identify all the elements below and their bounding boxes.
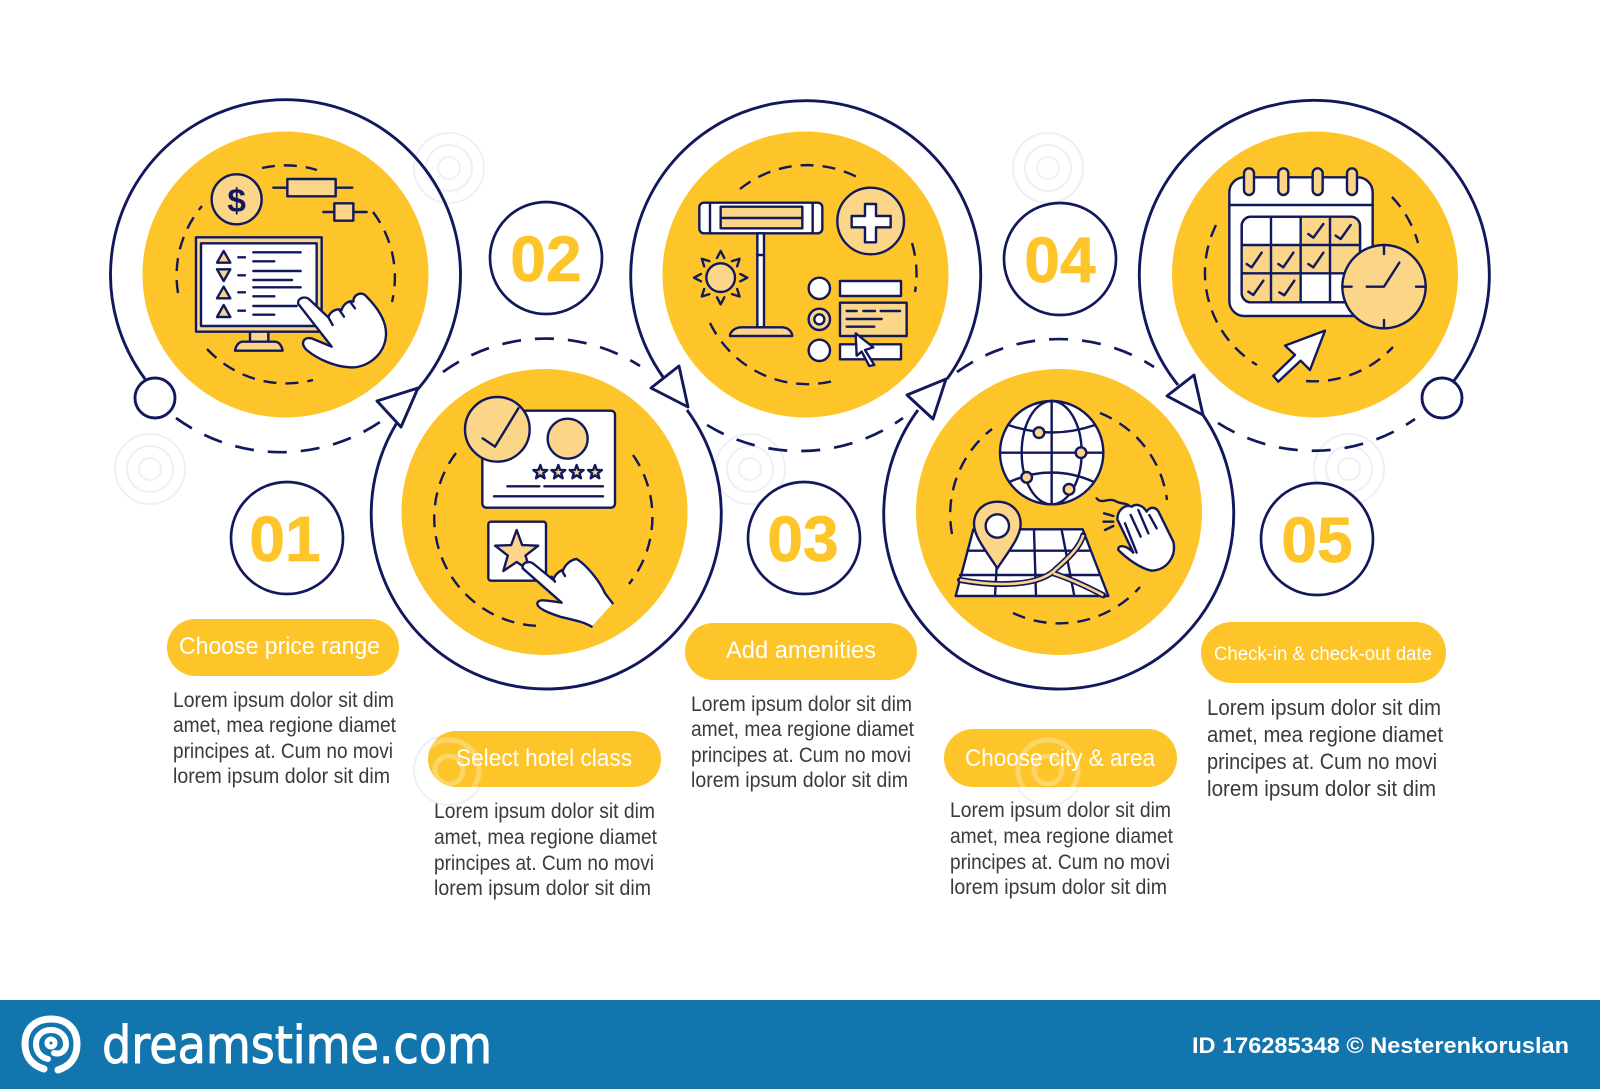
text block: step 5 description [1207,695,1443,801]
panel: step 5 dates [1172,132,1458,418]
text block: step 1 description [173,689,396,788]
number badge 02: 02 [510,223,582,295]
label: select hotel class [419,731,661,800]
text block: step 3 description: Lorem ipsum dolor sit dim [691,693,912,716]
icon: rating card and star with hand [465,397,615,627]
icon: heater, plus button and options list [694,188,907,366]
icon: price monitor with hand: $ [227,183,246,220]
icon: dreamstime spiral logo [25,1019,77,1070]
panel: step 2 hotel class [402,369,688,655]
label: select hotel class: Select hotel class [456,745,632,772]
panel: step 1 price range [142,132,428,418]
number badge 02 [490,202,602,314]
icon: calendar, clock and cursor [1229,168,1426,382]
panel: step 3 amenities [662,132,948,418]
footer bar [0,1000,1600,1089]
label: choose price range: Choose price range [179,633,380,660]
text block: step 2 description: principes at. Cum no movi [434,852,654,875]
logo wordmark: dreamstime.com [102,1016,492,1076]
text block: step 1 description: Lorem ipsum dolor sit dim [173,689,394,712]
number badge 03 [748,482,860,594]
label: choose price range [167,619,399,676]
text block: step 3 description: amet, mea regione diamet [691,718,914,741]
text block: step 5 description: principes at. Cum no movi [1207,749,1437,774]
panel: step 4 city and area [916,369,1202,655]
text block: step 4 description: Lorem ipsum dolor sit dim [950,799,1171,822]
image id and credit: ID 176285348 © Nesterenkoruslan [1192,1033,1569,1058]
number badge 05 [1261,483,1373,595]
number badge 05: 05 [1281,504,1353,576]
text block: step 5 description: lorem ipsum dolor sit dim [1207,776,1436,801]
text block: step 3 description [691,693,914,792]
text block: step 1 description: principes at. Cum no movi [173,740,393,763]
text block: step 4 description: principes at. Cum no movi [950,851,1170,874]
text block: step 2 description: lorem ipsum dolor sit dim [434,877,651,900]
text block: step 2 description [434,800,657,900]
number badge 04 [1004,203,1116,315]
icon: price monitor with hand [196,174,386,367]
number badge 01: 01 [249,503,321,575]
label: check-in and check-out date: Check-in & check-out date [1214,644,1432,665]
label: check-in and check-out date [1201,622,1446,683]
text block: step 1 description: amet, mea regione diamet [173,714,396,737]
text block: step 4 description: amet, mea regione diamet [950,825,1173,848]
number badge 03: 03 [767,503,839,575]
text block: step 4 description: lorem ipsum dolor sit dim [950,876,1167,899]
text block: step 2 description: Lorem ipsum dolor sit dim [434,800,655,823]
text block: step 1 description: lorem ipsum dolor sit dim [173,765,390,788]
text block: step 3 description: principes at. Cum no movi [691,744,911,767]
icon: globe, map pin and mouse hand [956,401,1174,596]
text block: step 3 description: lorem ipsum dolor sit dim [691,769,908,792]
label: choose city and area: Choose city & area [965,745,1156,772]
label: add amenities: Add amenities [726,637,876,664]
text block: step 5 description: amet, mea regione diamet [1207,722,1443,747]
number badge 04: 04 [1024,224,1096,296]
connector rings and arrows [111,100,1489,689]
label: add amenities [685,623,917,680]
number badge 01 [231,482,343,594]
label: choose city and area [944,729,1177,800]
text block: step 5 description: Lorem ipsum dolor sit dim [1207,695,1441,720]
text block: step 2 description: amet, mea regione diamet [434,826,657,849]
text block: step 4 description [950,799,1173,899]
